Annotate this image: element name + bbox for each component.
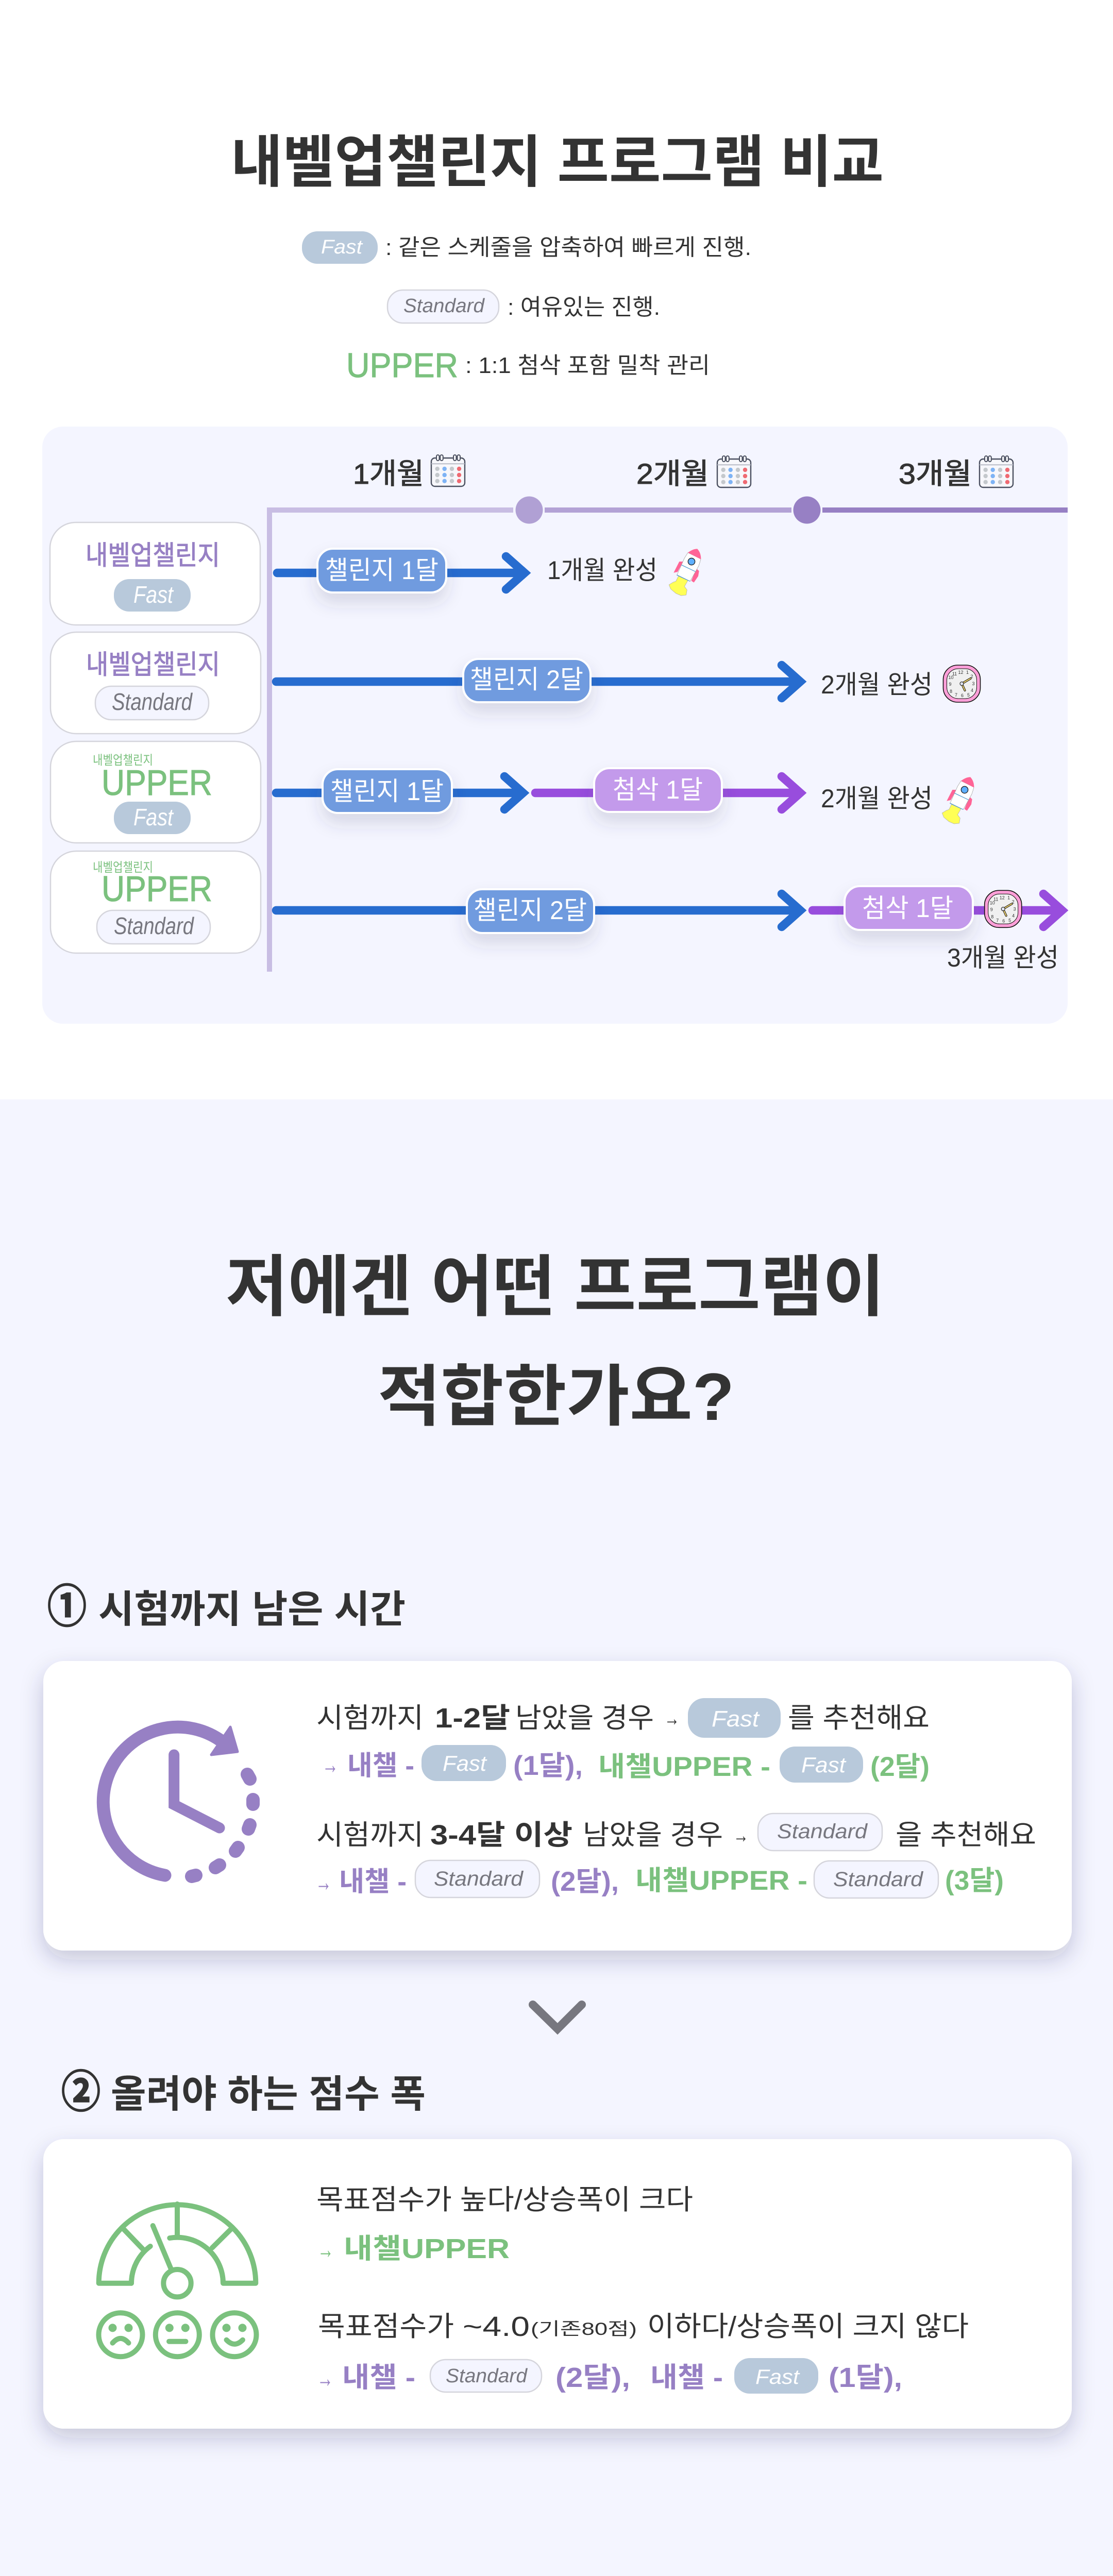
text block: high target: 내챌UPPER [344,2233,510,2264]
text block: 3-4 months: (2달), [551,1867,619,1897]
text block: low target: 내챌 - [342,2362,415,2393]
legend: fast [302,231,751,264]
card: upper fast: Fast [133,804,174,831]
card: upper standard: UPPER [102,869,212,909]
icon: clock: 5 [967,692,970,698]
panel: score range card [43,2139,1072,2429]
card: upper fast [50,741,261,843]
section label: time left: ① [47,1581,87,1632]
arrow: blue [277,556,525,589]
icon: clock: 1 [966,670,969,675]
text block: 3-4 months: Standard [833,1868,924,1891]
section background: recommendation [0,1099,1113,2576]
heading: which program [226,1249,885,1434]
arrow: purple [535,776,800,809]
text block: low target: Fast [755,2366,800,2388]
text block: low target: (2달), [555,2362,630,2393]
card: challenge fast: Fast [133,581,174,608]
text block: low target: 이하다/상승폭이 크지 않다 [647,2311,969,2342]
text block: 3-4 months: 을 추천해요 [896,1820,1036,1851]
pill: challenge 1 month [323,769,452,813]
gauge [99,2204,256,2297]
arrow: blue [276,894,800,927]
icon: clock [985,890,1022,927]
legend: fast: Fast [321,236,363,258]
text block: 1-2 months: 시험까지 [316,1703,424,1734]
completion text: 3개월 완성 [947,943,1059,972]
month 1 label: 1개월 [353,457,424,490]
title: 내벨업챌린지 프로그램 비교 [231,131,884,194]
text block: 3-4 months: Standard [777,1820,868,1843]
text block: low target: 내챌 - [650,2362,723,2393]
legend: upper: : 1:1 첨삭 포함 밀착 관리 [465,353,710,378]
text block: high target [316,2184,693,2264]
icon: clock: 8 [950,689,952,694]
text block: 3-4 months: 내챌 - [339,1867,407,1897]
legend: upper [346,346,710,385]
icon: clock: 6 [961,693,964,698]
pill: challenge 1 month [317,549,446,592]
arrow: purple [813,894,1062,927]
icon: clock: 8 [991,914,993,919]
text block: low target: → [317,2364,333,2393]
icon: clock: 1 [1007,895,1010,900]
text block: 3-4 months: → [315,1868,332,1896]
faces [99,2313,257,2357]
text block: 3-4 months: Standard [434,1868,524,1890]
text block: 3-4 months: 3-4달 이상 [430,1820,572,1851]
icon: calendar 3 [980,456,1013,487]
icon: clock: 3 [972,681,975,686]
completion text: 1개월 완성 [547,556,657,585]
section label: time left: 시험까지 남은 시간 [98,1588,406,1631]
icon: clock [943,665,980,702]
icon: calendar 2 [717,456,751,487]
pill: challenge 2 months: 챌린지 2달 [470,665,583,694]
heading: which program: 저에겐 어떤 프로그램이 [226,1249,885,1325]
text block: 3-4 months: (3달) [945,1866,1004,1896]
legend: standard: : 여유있는 진행. [508,295,660,320]
pill: tutoring 1 month [845,886,973,930]
legend: standard [387,290,660,323]
text block: 1-2 months: → [322,1750,339,1779]
text block: high target: 목표점수가 높다/상승폭이 크다 [316,2184,693,2215]
text block: 1-2 months: 내챌 - [347,1751,414,1781]
text block: high target: → [317,2235,334,2264]
icon: clock: 3 [1014,906,1016,911]
icon: chevron down [533,2005,582,2029]
text block: 3-4 months [315,1814,1036,1898]
section label: score range: ② [61,2067,100,2117]
card: challenge standard: 내벨업챌린지 [86,650,220,680]
text block: 1-2 months: Fast [712,1706,760,1732]
pill: challenge 2 months [463,659,591,702]
pill: tutoring 1 month [594,768,722,812]
icon: clock: 2 [970,674,973,679]
text block: 1-2 months: Fast [801,1753,847,1777]
icon: rocket [669,549,701,596]
text block: 1-2 months: → [664,1707,680,1730]
pill: tutoring 1 month: 첨삭 1달 [613,775,703,804]
text block: 1-2 months: (1달), [513,1751,583,1781]
card: challenge fast: 내벨업챌린지 [86,541,220,571]
text block: 1-2 months: 1-2달 [435,1703,510,1734]
card: upper fast: 내벨업챌린지 [93,753,153,768]
text block: 3-4 months: 내챌UPPER - [635,1866,807,1896]
card: upper fast: UPPER [102,762,212,803]
month 2 label: 2개월 [636,457,709,490]
row 1: challenge fast [277,549,701,596]
heading: which program: 적합한가요? [378,1359,734,1434]
card: upper standard: Standard [114,912,194,939]
panel: time left card [43,1661,1072,1951]
pill: tutoring 1 month: 첨삭 1달 [862,894,953,923]
icon: gauge with faces [99,2204,257,2357]
icon: clock: 10 [948,675,954,680]
text block: low target: (기존80점) [531,2319,637,2339]
row 3: upper fast [276,768,974,824]
timeline axes and milestones [267,497,1068,972]
icon: clock: 4 [1012,913,1015,918]
text block: 1-2 months: 를 추천해요 [788,1703,930,1734]
arrow: blue [276,776,523,809]
row 4: upper standard [276,886,1062,972]
row 2: challenge standard [276,659,980,702]
card: upper standard [50,851,261,953]
text block: 3-4 months: 남았을 경우 [583,1820,723,1851]
icon: clock: 2 [1012,899,1015,904]
legend: fast: : 같은 스케줄을 압축하여 빠르게 진행. [385,235,751,260]
legend: standard: Standard [403,295,485,317]
icon: clock: 12 [958,670,964,675]
text block: low target [317,2311,969,2394]
text block: 1-2 months: Fast [443,1751,487,1775]
legend: upper: UPPER [346,346,458,385]
icon: clock: 9 [990,907,993,912]
completion text: 2개월 완성 [821,784,933,813]
text block: 1-2 months [316,1698,930,1783]
icon: clock: 7 [996,918,999,923]
icon: clock: 11 [952,671,957,676]
icon: clock: 6 [1002,918,1005,923]
section label: score range: 올려야 하는 점수 폭 [111,2073,426,2115]
text block: low target: 목표점수가 [318,2311,454,2342]
text block: 1-2 months: (2달) [870,1752,930,1782]
icon: clock: 10 [990,900,995,905]
icon: clock: 5 [1008,918,1011,923]
pill: challenge 1 month: 챌린지 1달 [330,777,444,806]
card: challenge standard: Standard [112,688,193,715]
card: challenge standard [50,632,261,734]
text block: low target: ~4.0 [463,2311,530,2342]
pill: challenge 1 month: 챌린지 1달 [325,556,439,585]
text block: low target: Standard [446,2365,528,2387]
icon: clock: 11 [993,896,998,902]
text block: low target: (1달), [829,2362,902,2393]
pill: challenge 2 months [467,889,594,933]
month headers [353,455,1013,490]
icon: clock with arrow [103,1727,253,1876]
text block: 1-2 months: 남았을 경우 [515,1703,654,1734]
pill: challenge 2 months: 챌린지 2달 [474,896,587,925]
icon: clock: 7 [955,692,957,698]
program cards [50,522,261,953]
card: challenge fast [50,522,260,625]
legend [302,231,751,385]
arrow: blue [276,665,800,698]
icon: clock: 12 [1000,895,1005,900]
icon: clock: 9 [949,682,952,687]
icon: clock: 4 [971,688,973,693]
icon: rocket [942,777,974,824]
completion text: 2개월 완성 [821,670,933,699]
panel: comparison timeline [42,427,1068,1024]
icon: calendar 1 [431,455,465,486]
month 3 label: 3개월 [899,457,972,490]
text block: 1-2 months: 내챌UPPER - [598,1752,770,1782]
card: upper standard: 내벨업챌린지 [93,860,153,875]
text block: 3-4 months: → [733,1824,749,1847]
text block: 3-4 months: 시험까지 [316,1820,424,1851]
